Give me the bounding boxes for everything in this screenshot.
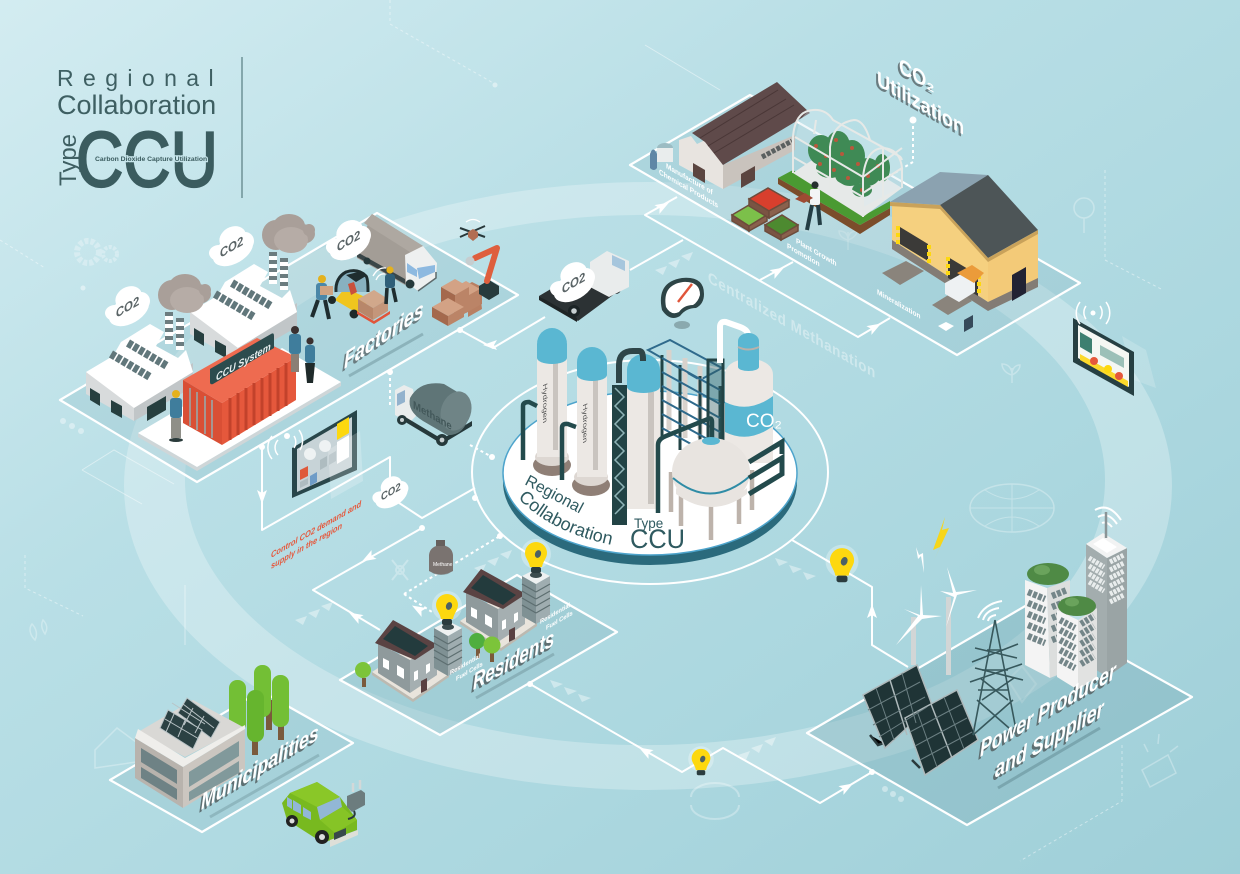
panel: CO2 utilization platform <box>630 95 1080 355</box>
methane truck: Methane <box>413 399 452 433</box>
label: Residents: Residents <box>473 624 554 695</box>
label: CO2 Utilization: CO₂ <box>899 54 935 97</box>
flow arrows <box>257 198 884 795</box>
stand <box>749 442 782 494</box>
municipal building <box>135 698 245 808</box>
central CCU plant <box>520 318 784 554</box>
residents small labels: Residential <box>450 653 480 677</box>
fuel cells <box>434 569 550 676</box>
CO2 clouds at factories <box>103 215 376 333</box>
tablet: power <box>1073 302 1156 396</box>
label: Residents: Residents <box>471 627 552 698</box>
small devices <box>938 315 973 332</box>
label: Centralized Methanation: Centralized Methanation <box>708 269 876 382</box>
CO2 cloud at forklift <box>324 215 376 267</box>
tower A <box>1025 563 1070 678</box>
CO2 utilization: tanks <box>650 143 673 170</box>
small labels utilization: Plant Growth <box>796 236 837 268</box>
disc text: Regional <box>522 473 586 517</box>
electric car <box>282 782 358 847</box>
hydrogen tower 1 <box>533 328 571 476</box>
tower 3 <box>627 354 660 509</box>
label: Power Producer and Supplier: and Supplier <box>993 697 1103 786</box>
pressure gauge <box>661 278 704 329</box>
methane truck <box>395 383 476 446</box>
heading: Regional Collaboration: Regional <box>57 65 223 91</box>
sign: CCU System: CCU System <box>216 341 271 384</box>
rooftop solar panels <box>160 698 220 749</box>
callout: control text: Control CO2 demand and <box>271 498 362 560</box>
tablet: CO2 control <box>268 410 363 499</box>
CO2 tank <box>720 322 782 463</box>
trees at residences <box>355 633 500 687</box>
dark pipes <box>523 402 576 480</box>
CO2 cloud at forklift: CO2 <box>337 227 360 255</box>
residents small labels: Fuel Cells <box>546 609 573 632</box>
spherical tank <box>658 418 752 540</box>
robot arm <box>466 248 499 300</box>
wifi signals <box>978 508 1121 621</box>
small labels utilization: Chemical Products <box>659 167 718 210</box>
drone <box>460 220 485 241</box>
cardboard boxes <box>432 279 482 326</box>
CO2 clouds at factories: CO2 <box>220 233 243 261</box>
CO2 truck <box>539 251 629 322</box>
divider <box>241 57 243 198</box>
label: Power Producer and Supplier: and Supplier <box>995 694 1105 783</box>
municipalities: trees <box>229 665 289 755</box>
connection nodes <box>259 116 916 775</box>
central disc <box>503 391 797 565</box>
warehouse <box>882 172 1038 315</box>
lightning bolts <box>916 517 949 573</box>
CO2 cloud on control line <box>371 473 412 514</box>
lattice column <box>612 351 643 525</box>
people at CCU system <box>169 326 315 442</box>
disc text <box>520 473 685 554</box>
solar panels <box>863 665 978 775</box>
hydrogen tower 2 <box>572 347 610 496</box>
plug <box>347 780 365 819</box>
panel: power producer platform <box>807 605 1192 825</box>
bulbs <box>432 539 858 775</box>
heading: Type: Type <box>55 134 82 186</box>
title block <box>55 65 223 203</box>
label: Municipalities: Municipalities <box>199 722 317 818</box>
CCU system container <box>183 333 296 445</box>
small labels utilization <box>659 161 921 321</box>
CO2 truck: CO2 <box>562 269 585 297</box>
heading: Regional Collaboration <box>57 65 223 120</box>
heading: CCU: CCU <box>76 117 218 203</box>
label: Municipalities: Municipalities <box>201 719 319 815</box>
small labels utilization: Mineralization <box>877 287 921 321</box>
label: Factories: Factories <box>344 295 424 374</box>
heading: Regional Collaboration: Collaboration <box>57 90 216 120</box>
CCU system platform <box>138 348 341 471</box>
panel: municipalities platform <box>110 691 353 832</box>
tower C <box>1086 512 1127 677</box>
chevrons <box>60 252 904 802</box>
residents small labels: Fuel Cells <box>456 660 483 683</box>
small labels utilization: Manufacture of <box>666 161 713 197</box>
CO2 cloud on control line: CO2 <box>381 481 401 504</box>
faint icons <box>30 198 1178 819</box>
residents small labels <box>450 602 573 683</box>
label: CO2 Utilization: CO₂ <box>897 56 933 99</box>
green buildings <box>1025 512 1127 690</box>
label: CO2 Utilization: Utilization <box>875 69 962 142</box>
farmer <box>795 181 820 230</box>
power: turbines <box>896 567 977 675</box>
greenhouse <box>778 110 902 234</box>
subtitle: Carbon Dioxide Capture Utilization <box>95 156 207 163</box>
CO2 tank: CO₂ <box>746 411 782 432</box>
residents small labels: Residential <box>540 602 570 626</box>
callout: control text: supply in the region <box>271 520 342 571</box>
forklift and workers <box>312 266 396 324</box>
connection lines <box>262 120 913 803</box>
label: Power Producer and Supplier: Power Producer <box>978 659 1115 765</box>
chemical products building <box>679 82 810 189</box>
scaffold <box>648 340 723 461</box>
disc text: Collaboration <box>520 492 612 545</box>
panel: factories platform <box>60 213 518 482</box>
gas cylinder <box>429 540 453 575</box>
disc text: Type <box>634 516 663 531</box>
disc text: CCU <box>630 523 685 554</box>
residents: houses <box>372 569 537 702</box>
CO2 clouds at factories: CO2 <box>116 293 139 321</box>
hydrogen tower 1: Hydrogen <box>541 381 549 425</box>
tower B <box>1057 596 1097 690</box>
pylon <box>970 620 1023 735</box>
crates <box>732 188 798 240</box>
label: Factories: Factories <box>342 298 422 377</box>
ring band <box>124 182 1172 790</box>
factories: buildings <box>86 214 315 421</box>
panel: residents platform <box>340 575 617 735</box>
label: Power Producer and Supplier: Power Producer <box>980 656 1117 762</box>
label: CO2 Utilization: Utilization <box>877 67 964 140</box>
delivery truck <box>357 214 437 291</box>
hydrogen tower 2: Hydrogen <box>581 401 589 445</box>
small labels utilization: Promotion <box>787 241 820 269</box>
gas cylinder: Methane <box>433 562 453 568</box>
